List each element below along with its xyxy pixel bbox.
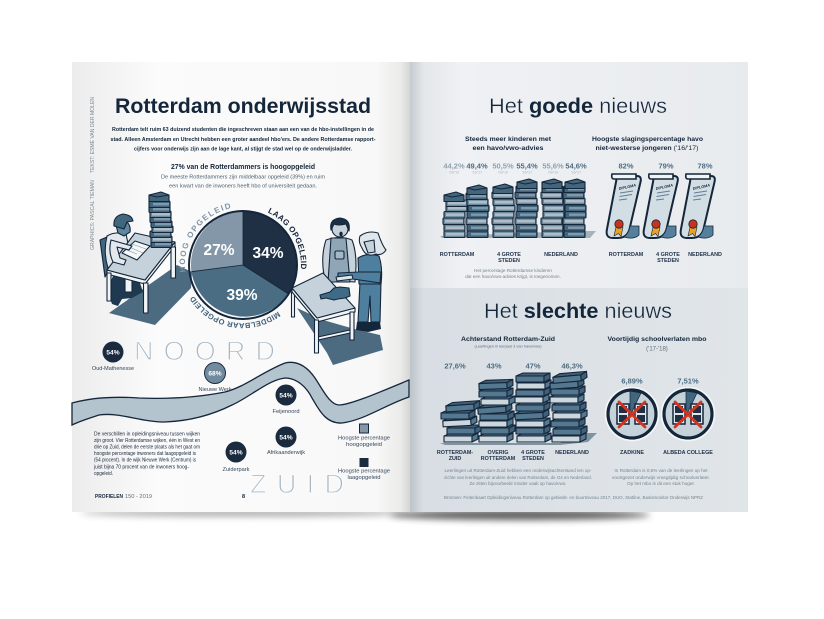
sub text: De meeste Rotterdammers zijn middelbaar opgeleid (39%) en ruim bbox=[161, 174, 325, 180]
category labels: 4 GROTE bbox=[521, 450, 545, 456]
district: Zuiderpark: 54% bbox=[229, 450, 243, 456]
district: Nieuwe Werk: 68% bbox=[208, 370, 222, 378]
chart title: havo/vwo-advies: een havo/vwo-advies bbox=[472, 145, 544, 152]
chart title: havo/vwo-advies: Steeds meer kinderen met bbox=[465, 136, 552, 143]
district: Feijenoord: 54% bbox=[279, 392, 293, 400]
left page bbox=[71, 62, 410, 512]
pie labels: MIDDELBAAR OPGELEID bbox=[190, 297, 280, 328]
stack: Rotterdam 09/10 bbox=[443, 192, 467, 238]
values: 47% bbox=[525, 362, 541, 370]
category labels: ZUID bbox=[449, 456, 461, 462]
district: Oud-Mathenesse: 54% bbox=[106, 350, 120, 356]
category labels: NEDERLAND bbox=[555, 450, 589, 456]
desk top bbox=[107, 233, 176, 313]
vise bbox=[320, 287, 350, 300]
stack: Rotterdam 16/17 bbox=[466, 185, 489, 238]
intro text: Rotterdam telt ruim 63 duizend studenten die ingeschreven staan aan een van de hbo-instellingen in de bbox=[112, 127, 375, 133]
pie chart bbox=[180, 204, 306, 328]
book chart bbox=[437, 362, 597, 462]
legend: laagopgeleid bbox=[338, 458, 390, 481]
footer: PROFIELEN bbox=[95, 494, 123, 500]
category labels: ROTTERDAM bbox=[440, 252, 475, 258]
stack: Rotterdam-Zuid bbox=[441, 401, 481, 442]
values: '16/'17 bbox=[571, 170, 581, 174]
vertical credits: TEKST: ESMÉ VAN DER MOLEN bbox=[89, 97, 96, 173]
category labels bbox=[440, 252, 578, 264]
note: achterstand: Ze zitten bijvoorbeeld minder vaak op havo/vwo. bbox=[470, 481, 566, 486]
book chart bbox=[440, 162, 596, 264]
category labels: STEDEN bbox=[498, 258, 520, 264]
vertical credits bbox=[89, 97, 96, 250]
note: schoolverlaten: In Rotterdam is 0,6% van de leerlingen op het bbox=[614, 468, 708, 473]
diploma chart bbox=[607, 162, 722, 264]
title: Rotterdam onderwijsstad bbox=[115, 94, 371, 118]
pie labels bbox=[180, 204, 306, 328]
footer: 150 - 2019 bbox=[125, 494, 152, 500]
paragraph bbox=[93, 432, 200, 477]
district: Afrikaanderwijk: Afrikaanderwijk bbox=[267, 450, 305, 456]
legend: hoogopgeleid bbox=[338, 424, 390, 448]
category labels: STEDEN bbox=[522, 456, 544, 462]
sources: Bronnen: Feitenkaart Opleidingsniveau Rotterdam op gebieds- en buurtniveau 2017, DUO, Statline, Basismonitor Onderwijs NPRZ bbox=[444, 495, 703, 500]
values: 46,3% bbox=[561, 362, 583, 370]
dropout: Albeda College bbox=[662, 376, 714, 456]
chart title: slagingspercentage: Hoogste slagingspercentage havo bbox=[592, 136, 703, 143]
district: Nieuwe Werk bbox=[198, 362, 232, 393]
chart title: schoolverlaten: Voortijdig schoolverlaten mbo bbox=[608, 336, 706, 343]
intro text bbox=[110, 127, 376, 152]
dropout: Zadkine bbox=[606, 376, 658, 456]
district: Zuiderpark bbox=[222, 442, 250, 473]
chart title: slagingspercentage bbox=[592, 136, 703, 152]
category labels bbox=[609, 252, 722, 264]
district: Oud-Mathenesse: Oud-Mathenesse bbox=[92, 366, 134, 372]
book pile on desk bbox=[149, 192, 173, 248]
category labels: STEDEN bbox=[657, 258, 679, 264]
river bbox=[72, 362, 409, 425]
values: '09/'10 bbox=[548, 170, 558, 174]
values: 27,6% bbox=[444, 362, 466, 370]
values: '16/'17 bbox=[522, 170, 532, 174]
stack: Nederland 09/10 bbox=[541, 179, 564, 238]
legend: laagopgeleid: laagopgeleid bbox=[348, 475, 381, 481]
district: Feijenoord: Feijenoord bbox=[272, 409, 300, 415]
paragraph: opgeleid. bbox=[94, 471, 113, 477]
values: 55,4% bbox=[516, 162, 538, 170]
chart title: achterstand: Achterstand Rotterdam-Zuid bbox=[461, 336, 555, 343]
chart note bbox=[465, 268, 561, 279]
values: 79% bbox=[658, 162, 674, 170]
heading: Het goede nieuws bbox=[489, 94, 667, 118]
district: Oud-Mathenesse bbox=[92, 342, 134, 372]
stack: 4 grote steden 09/10 bbox=[492, 184, 515, 238]
dropout: Zadkine: 6,89% bbox=[621, 376, 643, 386]
values: '16/'17 bbox=[472, 170, 482, 174]
label: zuid: ZUID bbox=[250, 469, 344, 499]
category labels: NEDERLAND bbox=[688, 252, 722, 258]
subheading: 27% van de Rotterdammers is hoogopgeleid bbox=[171, 162, 315, 171]
values: 78% bbox=[697, 162, 713, 170]
stack: Nederland bbox=[550, 371, 587, 442]
dropout: Albeda College: ALBEDA COLLEGE bbox=[663, 450, 713, 456]
district: Feijenoord bbox=[272, 384, 300, 415]
right page: good news bbox=[410, 62, 748, 288]
note: schoolverlaten: voortgezet onderwijs vroegtijdig schoolverlater. bbox=[612, 475, 710, 480]
paragraph: De verschillen in opleidingsniveau tussen wijken bbox=[94, 432, 200, 438]
label: noord: NOORD bbox=[134, 336, 275, 366]
chart note: dat een havo/vwo-advies krijgt, is toegenomen. bbox=[465, 274, 561, 279]
stack: 4 grote steden 16/17 bbox=[515, 179, 538, 238]
diploma: 4 grote steden: DIPLOMA bbox=[655, 183, 674, 191]
vertical credits: GRAPHICS: PASCAL TIEMAN bbox=[90, 180, 96, 250]
intro text: stad. Alleen Amsterdam en Utrecht hebben een groter aandeel hbo'ers. De andere Rotterdamse rapport- bbox=[110, 137, 376, 143]
sub text bbox=[161, 174, 325, 190]
note: schoolverlaten bbox=[612, 468, 710, 486]
chart title: schoolverlaten: ('17-'18) bbox=[646, 346, 668, 352]
note: schoolverlaten: Op het mbo is dit een stuk hoger. bbox=[627, 481, 695, 486]
paragraph: (54 procent). In de wijk Nieuwe Werk (Centrum) is bbox=[94, 458, 196, 464]
footer: 8 bbox=[242, 494, 245, 500]
category labels: ROTTERDAM- bbox=[437, 450, 473, 456]
diploma: Rotterdam: DIPLOMA bbox=[618, 183, 637, 191]
category labels bbox=[437, 450, 589, 462]
values: 44,2% bbox=[443, 162, 465, 170]
values: 82% bbox=[618, 162, 634, 170]
legend: hoogopgeleid: hoogopgeleid bbox=[346, 442, 382, 448]
paragraph: zijn groot. Vier Rotterdamse wijken, één in West en bbox=[94, 438, 200, 444]
district: Zuiderpark: Zuiderpark bbox=[222, 467, 250, 473]
stack: 4 grote steden bbox=[515, 373, 551, 442]
paragraph: juist bijna 70 procent van de inwoners hoog- bbox=[93, 464, 189, 470]
values bbox=[444, 362, 583, 370]
page shadow bbox=[80, 510, 650, 520]
values: 54,6% bbox=[565, 162, 587, 170]
values: '09/'10 bbox=[498, 170, 508, 174]
paragraph: hoogste percentage inwoners dat laagopgeleid is bbox=[94, 451, 196, 457]
legend: hoogopgeleid: Hoogste percentage bbox=[338, 436, 390, 442]
values: '09/'10 bbox=[449, 170, 459, 174]
heading: Het slechte nieuws bbox=[484, 299, 672, 323]
diploma: Nederland: DIPLOMA bbox=[692, 183, 711, 191]
district: Afrikaanderwijk bbox=[267, 426, 305, 456]
sub text: een kwart van de inwoners heeft hbo of universiteit gedaan. bbox=[169, 184, 317, 190]
workbench bbox=[292, 273, 355, 353]
category labels: 4 GROTE bbox=[656, 252, 680, 258]
pie values bbox=[203, 242, 284, 304]
category labels: ROTTERDAM bbox=[609, 252, 644, 258]
district: Nieuwe Werk: Nieuwe Werk bbox=[198, 387, 232, 393]
pie values: 27% bbox=[203, 242, 235, 259]
chart title: slagingspercentage: niet-westerse jongeren ('16/'17) bbox=[596, 145, 698, 152]
intro text: cijfers voor onderwijs zijn aan de lage kant, al stijgt de stad wel op de onderwijsladder. bbox=[134, 146, 352, 152]
right page: bad news bbox=[410, 288, 748, 512]
values: 50,5% bbox=[492, 162, 514, 170]
stack: Nederland 16/17 bbox=[563, 179, 586, 238]
chart title: achterstand: (Leerlingen in leerjaar 3 van havo/vwo) bbox=[474, 344, 542, 348]
district: Afrikaanderwijk: 54% bbox=[279, 434, 293, 442]
category labels: 4 GROTE bbox=[497, 252, 521, 258]
dropout: Zadkine: ZADKINE bbox=[620, 450, 644, 456]
legend: laagopgeleid: Hoogste percentage bbox=[338, 468, 390, 474]
pie values: 34% bbox=[252, 245, 284, 262]
values: 55,6% bbox=[542, 162, 564, 170]
category labels: OVERIG bbox=[488, 450, 508, 456]
footer bbox=[95, 494, 245, 500]
values bbox=[618, 162, 713, 170]
category labels: NEDERLAND bbox=[544, 252, 578, 258]
chart title: achterstand bbox=[461, 336, 555, 348]
illustration: student at desk bbox=[100, 192, 192, 325]
values bbox=[443, 162, 587, 174]
chart note: Het percentage Rotterdamse kinderen bbox=[474, 268, 552, 273]
note: achterstand bbox=[444, 468, 592, 486]
illustration: workers at workbench bbox=[292, 218, 386, 365]
paragraph: drie op Zuid, delen de eerste plaats als het gaat om bbox=[94, 444, 200, 450]
pie labels: HOOG OPGELEID bbox=[180, 204, 230, 272]
note: achterstand: zichte van leerlingen uit andere delen van Rotterdam, de G4 en Nederland. bbox=[444, 475, 592, 480]
pie labels: LAAG OPGELEID bbox=[268, 208, 306, 269]
note: achterstand: Leerlingen uit Rotterdam-Zuid hebben een onderwijsachterstand ten op- bbox=[444, 468, 592, 473]
dropout: Albeda College: 7,51% bbox=[677, 376, 699, 386]
stack: overig Rotterdam bbox=[478, 379, 515, 442]
values: 49,4% bbox=[466, 162, 488, 170]
chart title: schoolverlaten bbox=[608, 336, 706, 352]
values: 43% bbox=[486, 362, 502, 370]
pie values: 39% bbox=[226, 287, 258, 304]
chart title: havo/vwo-advies bbox=[465, 136, 552, 152]
category labels: ROTTERDAM bbox=[481, 456, 516, 462]
